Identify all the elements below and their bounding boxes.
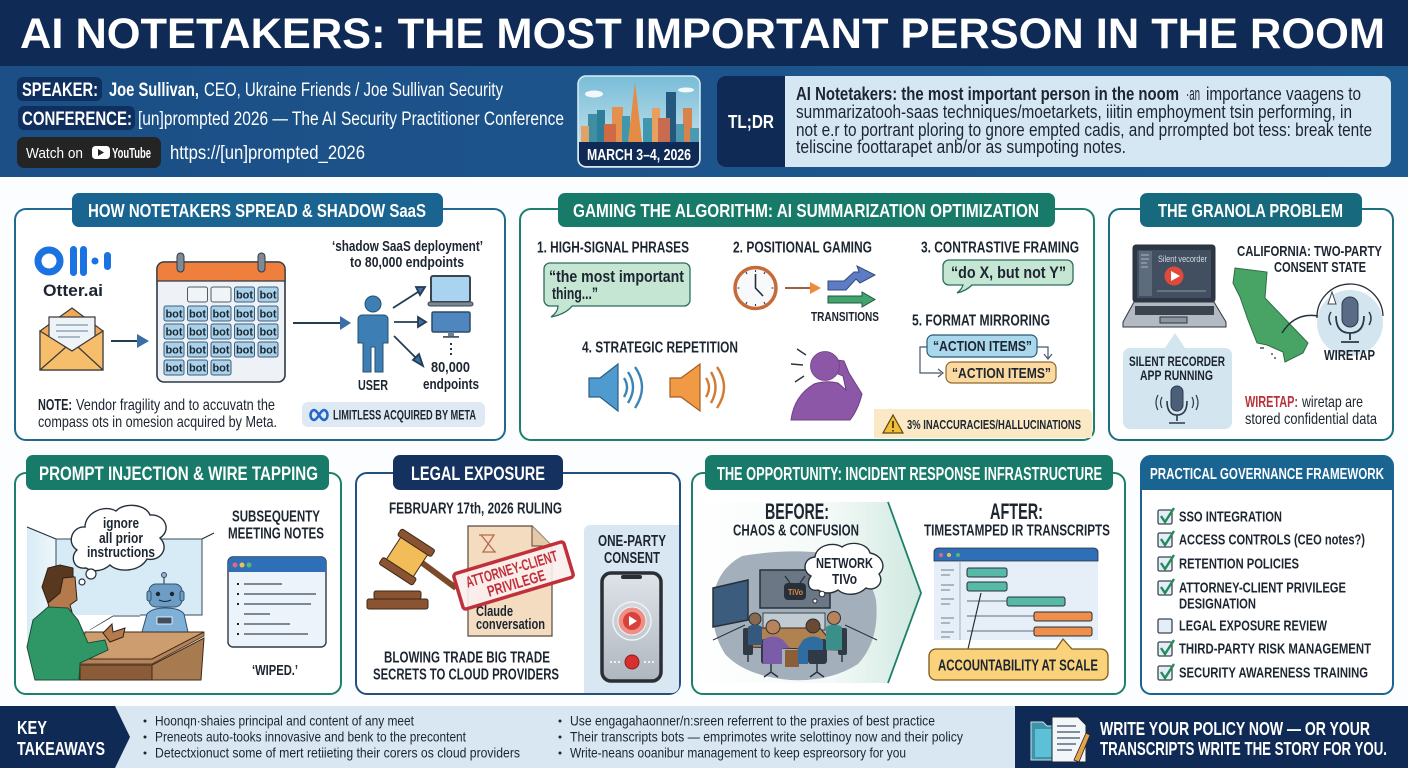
callout: silent recorder: APP RUNNING bbox=[1140, 367, 1213, 383]
heading bbox=[1141, 455, 1393, 490]
heading bbox=[1140, 193, 1362, 227]
icon: calendar: bot bbox=[236, 326, 253, 338]
document bbox=[468, 526, 552, 636]
wiretap note: wiretap are bbox=[1301, 394, 1363, 411]
item 1: “the most important bbox=[549, 267, 684, 286]
conference line: [un]prompted 2026 — The AI Security Practitioner Conference bbox=[138, 109, 564, 130]
icon: calendar: bot bbox=[236, 308, 253, 320]
icon: calendar: bot bbox=[165, 308, 183, 320]
stamp: ATTORNEY-CLIENT bbox=[464, 548, 560, 592]
icon: calendar: bot bbox=[212, 362, 230, 374]
one party consent panel bbox=[584, 525, 679, 693]
icon: calendar: bot bbox=[165, 344, 183, 356]
document: conversation bbox=[476, 616, 545, 633]
icon: wiretap mic bbox=[1317, 284, 1383, 364]
after label: AFTER: bbox=[990, 499, 1043, 524]
youtube badge: Watch on bbox=[26, 145, 83, 162]
before label: CHAOS & CONFUSION bbox=[733, 522, 859, 540]
one party consent panel: CONSENT bbox=[604, 550, 660, 567]
note bbox=[38, 397, 277, 431]
item 5: “ACTION ITEMS” bbox=[933, 338, 1032, 355]
conference line bbox=[18, 106, 564, 130]
chevron divider bbox=[693, 502, 921, 683]
item 3 bbox=[921, 240, 1079, 293]
youtube badge: YouTube bbox=[112, 145, 151, 162]
tl;dr box bbox=[717, 76, 1391, 167]
subsequent notes label: SUBSEQUENTY bbox=[232, 508, 320, 526]
icon: calendar: bot bbox=[236, 344, 253, 356]
callout: silent recorder: SILENT RECORDER bbox=[1129, 353, 1225, 369]
shadow saas caption bbox=[332, 238, 483, 271]
icon: otter logo bbox=[38, 246, 111, 300]
icon: user: USER bbox=[358, 377, 388, 394]
icon: gavel bbox=[367, 528, 456, 609]
icon: laptop with recorder: Silent vecorder bbox=[1158, 254, 1207, 264]
icon: calendar bbox=[157, 253, 285, 382]
panel: the opportunity bbox=[692, 455, 1125, 694]
panel: how notetakers spread bbox=[15, 193, 505, 440]
arrow bbox=[293, 316, 351, 330]
icon: confused person bbox=[791, 349, 862, 420]
heading bbox=[26, 455, 329, 490]
icon: notes window bbox=[228, 557, 326, 647]
icon: monitor bbox=[432, 312, 470, 338]
thought cloud: all prior bbox=[99, 530, 143, 547]
item 5: “ACTION ITEMS” bbox=[952, 365, 1051, 382]
panel: prompt injection bbox=[15, 455, 341, 694]
heading bbox=[558, 193, 1055, 227]
trade secrets caption: SECRETS TO CLOUD PROVIDERS bbox=[373, 666, 559, 684]
youtube badge bbox=[17, 137, 161, 168]
takeaways column 1: Preneots auto-tooks innovasive and benk to the precontent bbox=[155, 728, 466, 744]
panel: governance framework bbox=[1141, 455, 1393, 694]
icon: calendar: bot bbox=[212, 308, 230, 320]
date badge with skyline bbox=[578, 76, 700, 167]
icon: calendar: bot bbox=[212, 326, 230, 338]
note: NOTE: bbox=[38, 397, 72, 414]
thought cloud: network tivo bbox=[805, 543, 883, 603]
item 4: 4. STRATEGIC REPETITION bbox=[582, 340, 738, 356]
item 1 bbox=[537, 240, 690, 317]
item 2: TRANSITIONS bbox=[811, 310, 879, 324]
wiretap note: stored confidential data bbox=[1245, 411, 1377, 428]
document: Claude bbox=[476, 603, 513, 620]
icon: blue speaker bbox=[589, 364, 642, 411]
takeaways label: TAKEAWAYS bbox=[17, 739, 105, 759]
limitless badge bbox=[302, 402, 485, 427]
speaker line: CEO, Ukraine Friends / Joe Sullivan Security bbox=[204, 80, 503, 101]
header: title band bbox=[0, 0, 1408, 66]
item 5 bbox=[912, 312, 1056, 383]
trade secrets caption bbox=[373, 650, 559, 684]
endpoints label bbox=[423, 343, 479, 393]
heading: LEGAL EXPOSURE bbox=[411, 464, 545, 485]
icon: calendar: bot bbox=[189, 362, 206, 374]
thought cloud: ignore bbox=[103, 515, 139, 532]
note: compass ots in omesion acquired by Meta. bbox=[38, 414, 277, 431]
illustration: chaotic boardroom bbox=[712, 551, 877, 680]
item 5: 5. FORMAT MIRRORING bbox=[912, 312, 1050, 330]
heading: THE OPPORTUNITY: INCIDENT RESPONSE INFRASTRUCTURE bbox=[717, 464, 1102, 484]
panel: gaming the algorithm bbox=[520, 193, 1094, 440]
subsequent notes label: MEETING NOTES bbox=[228, 526, 324, 542]
icon: laptop with recorder bbox=[1123, 245, 1226, 327]
item 4 bbox=[582, 340, 738, 411]
heading bbox=[393, 455, 563, 490]
item 1: 1. HIGH-SIGNAL PHRASES bbox=[537, 240, 689, 256]
icon: calendar: bot bbox=[189, 326, 206, 338]
checklist: ATTORNEY-CLIENT PRIVILEGE bbox=[1179, 580, 1346, 596]
takeaways column 1: Detectxionuct some of mert retiieting their corers os cloud providers bbox=[155, 744, 520, 760]
california label bbox=[1237, 243, 1382, 276]
icon: calendar: bot bbox=[212, 344, 230, 356]
checklist: SSO INTEGRATION bbox=[1179, 508, 1282, 526]
title: AI NOTETAKERS: THE MOST IMPORTANT PERSON IN THE ROOM bbox=[20, 10, 1385, 58]
stamp bbox=[453, 541, 574, 610]
takeaways column 2 bbox=[558, 712, 963, 760]
footer: key takeaways bbox=[0, 706, 1015, 768]
wiretap note: WIRETAP: bbox=[1245, 394, 1298, 411]
takeaways label bbox=[17, 718, 105, 759]
icon: folder and document bbox=[1031, 717, 1090, 762]
thought cloud: instructions bbox=[87, 544, 155, 561]
icon: laptop bbox=[428, 276, 473, 306]
checklist: RETENTION POLICIES bbox=[1179, 556, 1299, 572]
tl;dr box: TL;DR bbox=[728, 112, 774, 132]
icon: phone bbox=[602, 573, 661, 681]
heading bbox=[705, 455, 1113, 490]
one party consent panel: ONE-PARTY bbox=[598, 533, 666, 550]
icon: calendar: bot bbox=[236, 290, 253, 302]
takeaways column 2: Use engagahaonner/n:sreen referrent to the praxies of best practice bbox=[570, 712, 935, 728]
thought cloud bbox=[71, 505, 166, 585]
conference line: CONFERENCE: bbox=[22, 109, 132, 130]
url: https://[un]prompted_2026 bbox=[170, 143, 365, 164]
heading: GAMING THE ALGORITHM: AI SUMMARIZATION OPTIMIZATION bbox=[573, 201, 1039, 221]
speaker line: Joe Sullivan, bbox=[109, 80, 199, 101]
date badge with skyline: MARCH 3–4, 2026 bbox=[587, 147, 691, 164]
after label bbox=[924, 499, 1110, 540]
footer: call to action bbox=[1015, 706, 1408, 768]
icon: calendar: bot bbox=[165, 362, 183, 374]
callout: accountability: ACCOUNTABILITY AT SCALE bbox=[938, 658, 1098, 674]
checklist: DESIGNATION bbox=[1179, 596, 1256, 612]
icon: otter logo: Otter.ai bbox=[43, 281, 103, 300]
stamp: PRIVILEGE bbox=[485, 567, 548, 601]
tl;dr box: importance vaagens to bbox=[1206, 84, 1361, 104]
icon: calendar: bot bbox=[259, 308, 277, 320]
ruling label: FEBRUARY 17th, 2026 RULING bbox=[389, 500, 562, 518]
arrow bbox=[111, 334, 149, 348]
tl;dr box: teliscine foottarapet anb/or as sumpoting notes. bbox=[796, 137, 1126, 157]
icon: calendar: bot bbox=[189, 344, 206, 356]
subsequent notes label bbox=[228, 508, 324, 542]
icon: wiretap mic: WIRETAP bbox=[1324, 347, 1375, 364]
item 3: “do X, but not Y” bbox=[951, 263, 1066, 282]
cta text bbox=[1100, 719, 1387, 759]
item 2: 2. POSITIONAL GAMING bbox=[733, 240, 872, 256]
heading: THE GRANOLA PROBLEM bbox=[1158, 201, 1343, 221]
takeaways label: KEY bbox=[17, 718, 47, 738]
after label: TIMESTAMPED IR TRANSCRIPTS bbox=[924, 522, 1110, 540]
icon: user bbox=[358, 296, 388, 394]
wiretap note bbox=[1245, 394, 1377, 428]
shadow saas caption: ‘shadow SaaS deployment’ bbox=[332, 238, 483, 255]
heading: PROMPT INJECTION & WIRE TAPPING bbox=[39, 464, 318, 485]
wiped label: ‘WIPED.’ bbox=[252, 662, 298, 679]
before label bbox=[733, 499, 859, 540]
item 3: 3. CONTRASTIVE FRAMING bbox=[921, 240, 1079, 256]
icon: calendar: bot bbox=[189, 308, 206, 320]
panel: legal exposure bbox=[356, 455, 680, 694]
illustration: chaotic boardroom: TiVo bbox=[788, 587, 803, 597]
item 1: thing...” bbox=[552, 284, 598, 303]
endpoints label: endpoints bbox=[423, 376, 479, 393]
checklist bbox=[1158, 508, 1371, 682]
takeaways column 2: Their transcripts bots — emprimotes write selottinoy now and their policy bbox=[570, 728, 963, 744]
note: Vendor fragility and to accuvatn the bbox=[76, 397, 275, 414]
callout: accountability bbox=[929, 639, 1108, 680]
trade secrets caption: BLOWING TRADE BIG TRADE bbox=[384, 650, 550, 666]
icon: calendar: bot bbox=[165, 326, 183, 338]
takeaways column 2: Write-neans ooanibur management to keep espreorsory for you bbox=[570, 744, 906, 760]
icon: orange speaker bbox=[670, 364, 724, 411]
panel: granola problem bbox=[1109, 193, 1393, 440]
icon: calendar: bot bbox=[259, 290, 277, 302]
icon: mic bbox=[1156, 386, 1198, 423]
tl;dr box: AI Notetakers: the most important person in the noom bbox=[796, 84, 1179, 104]
icon: person bbox=[27, 565, 125, 680]
thought cloud: network tivo: NETWORK bbox=[816, 555, 873, 572]
desk bbox=[80, 632, 204, 680]
illustration: office room bbox=[27, 505, 214, 680]
checklist: LEGAL EXPOSURE REVIEW bbox=[1179, 618, 1328, 634]
icon: fan out arrows bbox=[393, 287, 426, 366]
map: california bbox=[1233, 268, 1318, 362]
icon: calendar: bot bbox=[259, 326, 277, 338]
info band bbox=[0, 66, 1408, 177]
speaker line bbox=[17, 77, 503, 101]
takeaways column 1 bbox=[144, 712, 520, 760]
limitless badge: LIMITLESS ACQUIRED BY META bbox=[333, 408, 476, 422]
callout: silent recorder bbox=[1123, 333, 1232, 429]
item 2 bbox=[733, 240, 879, 324]
timeline window bbox=[934, 548, 1098, 649]
heading: HOW NOTETAKERS SPREAD & SHADOW SaaS bbox=[88, 201, 426, 221]
california label: CONSENT STATE bbox=[1274, 259, 1366, 276]
icon: robot bbox=[142, 572, 188, 632]
takeaways column 1: Hoonqn·shaies principal and content of any meet bbox=[155, 712, 414, 728]
heading bbox=[72, 193, 443, 227]
speaker line: SPEAKER: bbox=[22, 80, 98, 101]
warning badge bbox=[874, 409, 1092, 438]
endpoints label: 80,000 bbox=[431, 359, 470, 376]
tl;dr box: ·an bbox=[1186, 84, 1200, 104]
thought cloud: network tivo: TIVo bbox=[832, 571, 857, 588]
warning badge: 3% INACCURACIES/HALLUCINATIONS bbox=[907, 417, 1081, 432]
before label: BEFORE: bbox=[765, 499, 829, 524]
icon: envelope bbox=[40, 308, 103, 370]
icon: calendar: bot bbox=[259, 344, 277, 356]
shadow saas caption: to 80,000 endpoints bbox=[350, 254, 464, 271]
